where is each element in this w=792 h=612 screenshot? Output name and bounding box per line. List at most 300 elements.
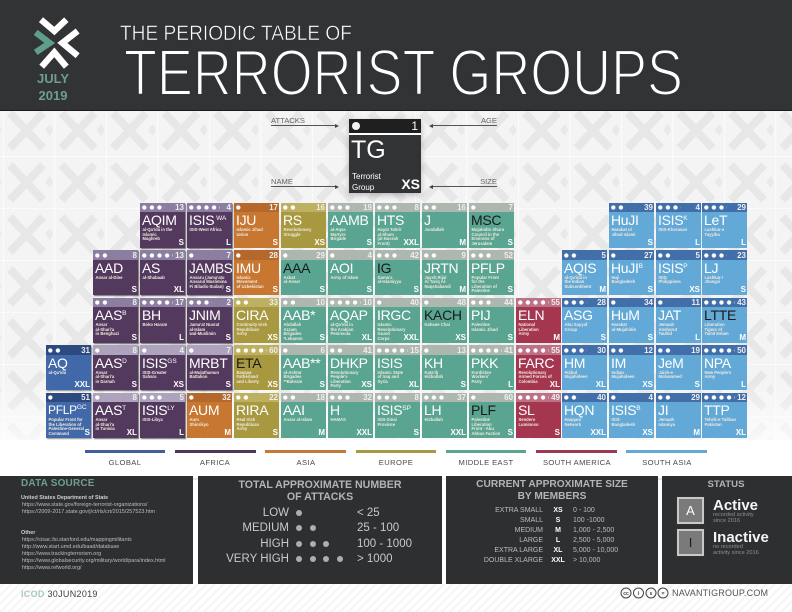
cell: PIJ: 44 [504,298,513,307]
cell: JI: JI [658,402,668,418]
cell: HTS: al-Sham [378,232,394,237]
cell: IMU: 28 [269,250,278,260]
cell: AOI: 4 [368,250,372,260]
cell: DHKP: DHKP [330,354,368,370]
cell: AAI: M [318,428,325,436]
cell: AS: XL [174,285,184,294]
cell: LeT: L [741,238,746,246]
cell: KACH: XS [455,332,466,342]
cell: MSC: MSC [471,212,501,228]
cell: JAT: Anshorut [658,327,677,332]
cell: AAS D: 8 [133,346,137,354]
cell: PFLP: S [508,285,513,294]
cell: HuM: ul-Mujahidin [612,327,636,332]
legend: regions: MIDDLE EAST [458,458,514,467]
cell: IJU: IJU [236,212,256,228]
cell: ISIS SP: ISIS-Sinai [378,417,397,422]
cell: ISIS K: L [695,238,700,246]
heading: attacks: OF ATTACKS [287,491,353,503]
key: name label: NAME [271,177,293,186]
status active: A [686,503,695,518]
cell: SL: 49 [551,393,560,402]
cell: PLF: S [508,428,513,436]
cell: ETA [234,345,279,390]
cell: SL: Luminoso [518,422,539,427]
source links: https://www.trackingterrorism.org [22,551,101,557]
cell: JNIM: al-Islam [190,327,205,332]
cell: PFLP: for the [472,279,485,284]
cell: AAI: Ansar al-Islam [284,417,312,422]
size levels: 2,500 - 5,000 [573,537,614,544]
cell: AQIM: Islamic [142,232,157,237]
key element: TG: TG [351,136,386,164]
cell: MSC: Environs of [472,236,495,241]
legend: regions: AFRICA [200,458,230,467]
status inactive [677,529,769,556]
cell: JRTN [422,250,467,295]
cell: H: XXL [356,428,372,436]
cell: AAA: Asbat [284,274,295,280]
license icons: s [650,591,653,597]
key: name label [271,177,336,187]
cell: AOI: S [367,285,372,294]
cell: AAS B [93,298,138,342]
cell: HM: Mujahideen [564,374,588,379]
cell: AAS D: AASD [95,354,127,370]
cell: HM: HM [564,354,585,370]
cell: HTS: (al-Nusrah [378,236,398,241]
cell: AQIM: al-Qa'ida in the [142,227,172,232]
cell: AQIS: M [599,285,606,294]
cell: RS: Struggle [284,232,300,237]
cell: ASG: Group [564,327,577,332]
cell: JNIM: S [226,332,231,342]
cell: JI: Islamiya [658,422,675,427]
size levels: EXTRA SMALL [495,507,543,514]
cell: JI: Jemaah [658,417,674,422]
cell: HuJI B: HuJIB [611,260,643,276]
cell: HuM: S [648,332,653,342]
date: JULY [37,71,69,86]
cell: HuJI B: 27 [644,250,653,260]
cell: AAS T: XL [127,428,137,436]
cell: IM: Indian [612,370,624,374]
cell: JAT: L [695,332,700,342]
cell: IM: XS [642,380,653,389]
cell: JRTN: 9 [462,250,466,260]
cell: AQAP: Peninsula [330,331,350,336]
cell: JeM: JeM [658,354,684,370]
cell: RIRA: S [273,428,278,436]
cell: JRTN: Naqshabandi [424,284,451,289]
cell: AAB* [281,298,326,342]
cell: AAB**: AAB** [283,354,320,370]
cell: AAA: AAA [283,260,310,276]
cell: ISIS SP: ISISSP [377,402,411,418]
attack levels: HIGH [260,538,289,550]
cell: TTP: Tehrik-e Taliban [704,417,736,422]
cell: ISIS K: ISISK [658,212,688,228]
cell: LH [422,392,467,438]
cell: ISIS GS: ISISGS [142,354,177,370]
cell: LeT: LeT [704,212,727,228]
cell: MRBT: Battalion [190,374,207,379]
heading: size [476,478,628,502]
cell: ELN: 55 [551,298,560,307]
cell: AAS T: in Tunisia [96,426,115,431]
cell: AQ: al-Qa'ida [48,370,66,374]
cell: IG: al-Islamiyya [378,279,401,284]
cell: HQN: HQN [564,402,594,418]
cell: KH [422,345,467,390]
heading: status: STATUS [708,479,744,490]
cell: HQN: XXL [590,428,606,436]
cell: LTTE: Liberation [704,322,725,327]
cell: ASG: ASG [564,307,593,323]
cell: AUM: AUM [189,402,219,418]
cell: NPA [702,345,747,390]
cell: PKK: PKK [471,354,498,370]
attack levels: MEDIUM [242,522,289,534]
cell: IJU: S [273,238,278,246]
cell: CIRA: Army [236,331,247,336]
size levels: 5,000 - 10,000 [573,547,618,554]
cell: AAB**: S [320,380,325,389]
cell: JNIM [187,298,232,342]
cell: BH [140,298,185,342]
cell: ETA: ETA [236,354,261,370]
cell: HuJI B [609,250,654,295]
cell: AAMB: Brigade [330,236,346,241]
cell: JeM [656,345,701,390]
cell: AQAP: AQAP [330,307,368,323]
cell: ISIS: of Iraq and [378,374,399,379]
cell: HuJI: HuJI [611,212,639,228]
cell: AAI [281,392,326,438]
cell: AQIM: S [179,238,184,246]
cell: HuJI B: Huji [612,274,619,280]
status active: Active [713,497,758,514]
size levels: L [556,537,560,544]
cell: HuJI B: Bangladesh [612,279,635,284]
cell: JAT: 11 [692,298,700,307]
cell: ISIS P: ISIS- [658,274,668,280]
cell: HTS: HTS [377,212,404,228]
cell: AQAP: the Arabian [330,327,353,332]
cell: JAT: Jemaah [658,322,674,327]
status active: since 2016 [713,518,740,524]
cell: AAD: Ansar al-Dine [96,274,122,280]
cell: PFLP GC [46,392,91,438]
cell: AUM [187,392,232,438]
cell: ELN [516,298,561,342]
key element: TG: XS [401,176,420,192]
cell: MSC [469,202,514,248]
cell: RIRA: RIRA [236,402,268,418]
attack levels: < 25 [357,507,380,519]
legend: regions: SOUTH AMERICA [543,458,611,467]
cell: AQAP: XL [362,332,372,342]
cell: JNIM: 2 [227,298,231,307]
cell: ISIS B: ISISB [611,402,641,418]
cell: RS: 16 [316,203,325,212]
cell: AAB*: Brigades [284,331,301,336]
cell: HuM [609,298,654,342]
cell: AAS T: al-Shari'a [96,422,114,427]
cell: PFLP GC: Command [48,431,69,436]
cell: AQIS: Subcontinent [564,284,591,289]
cell: RIRA: Real Irish [236,417,255,422]
cell: BH: Boko Haram [142,322,167,327]
cell: AAB**: Brigades [284,374,301,379]
cell: KH: Kata'ib [424,370,438,374]
cell: KH: Hizbollah [424,374,443,379]
cell: PFLP GC: S [85,428,90,436]
cell: AAB**: **Bahrain [284,379,302,384]
size levels: > 10,000 [573,557,600,564]
source links: http://www.start.umd.edu/baad/database [22,544,119,550]
panel: size key [446,476,658,584]
heading: attacks [238,478,402,503]
cell: AAB*: S [320,332,325,342]
key element: TG: Terrorist [352,172,381,181]
cell: ISIS GS: Sahara [142,374,156,379]
cell: PFLP: Popular Front [472,274,499,280]
cell: PFLP: PFLP [471,260,505,276]
cell: ISIS: ISIS [377,354,402,370]
cell: PKK: 41 [504,346,513,354]
cell: SL: S [555,428,560,436]
footer url: NAVANTIGROUP.COM [672,588,768,598]
cell: KH: KH [424,354,443,370]
cell: LTTE [702,298,747,342]
source links: https://www.refworld.org/ [22,565,82,571]
size levels: 1,000 - 2,500 [573,527,614,534]
cell: JAMBS [187,250,232,295]
cell: PIJ: S [508,332,513,342]
cell: IMU [234,250,279,295]
panel: data source [0,476,193,584]
cell: NPA: New People's [704,370,731,374]
cell: ETA: and Liberty [236,379,259,384]
cell: RIRA: 22 [269,393,278,402]
cell: CIRA: CIRA [236,307,268,323]
cell: ISIS P: XS [689,285,700,294]
cell: IRGC: Corps [378,336,390,341]
cell: HM: Hizbul [564,370,577,374]
cell: AAMB: S [367,238,372,246]
key: age label: AGE [481,116,497,125]
cell: DHKP: People's [330,374,348,379]
cell: MSC: Mujahidin Shura [472,227,504,232]
cell: HuJI [609,202,654,248]
cell: ISIS B: XS [642,428,653,436]
size levels: XS [553,507,563,514]
source links: https://cisac.fsi.stanford.edu/mappingmilitants [22,537,132,543]
source links [21,495,166,571]
cell: ETA: Basque [236,370,252,374]
cell: HQN: Network [564,422,581,427]
cell: JeM: Jaish-e [658,370,673,374]
cell: HTS: Hayat Tahrir [378,227,402,232]
cell: HuJI: Harakat ul [612,227,632,232]
cell: PKK: Workers' [472,374,489,379]
footer date: ICOD 30JUN2019 [21,589,98,599]
cell: MSC: Jerusalem [472,241,492,246]
cell: HTS: XXL [403,238,419,246]
legend: regions: SOUTH ASIA [642,458,692,467]
cell: LeT: 29 [737,203,746,212]
cell: ASG [562,298,607,342]
cell: JAMBS: JAMBS [189,260,233,276]
cell: CIRA [234,298,279,342]
cell: HuJI B: S [648,285,653,294]
cell: MSC: 7 [509,203,513,212]
cell: LTTE: LTTE [704,307,736,323]
cell: ISIS LY: ISIS-Libya [142,417,163,422]
cell: AS [140,250,185,295]
cell: JI: 29 [691,393,700,402]
cell: ISIS K [656,202,701,248]
cell: LJ: LJ [704,260,718,276]
cell: PFLP: Palestine [472,288,490,293]
cell: ISIS [375,345,420,390]
cell: AAI: 18 [316,393,325,402]
cell: DHKP [328,345,373,390]
cell: FARC: FARC [518,354,554,370]
cell: JI [656,392,701,438]
key: size label: SIZE [480,177,497,186]
license icons [620,588,668,598]
cell: IJU [234,202,279,248]
cell: IMU: Islamic [236,274,251,280]
cell: LTTE: 43 [737,298,746,307]
cell: FARC: XL [550,380,560,389]
cell: PIJ: Palestine [472,322,490,327]
cell: AAB** [281,345,326,390]
cell: LH: LH [424,402,441,418]
cell: MRBT [187,345,232,390]
table cells [46,203,747,440]
cell: AAB*: AAB* [283,307,315,323]
cell: RS: XS [314,238,325,246]
cell: ISIS P: Philippines [658,279,681,284]
cell: ETA: 60 [269,346,278,354]
cell: ISIS B [609,392,654,438]
cell: AAB**: al-Ashtar [284,370,302,374]
cell: ISIS SP [375,392,420,438]
cell: FARC: Revolutionary [518,370,546,374]
cell: AAS B: al-Shari'a [96,327,114,332]
cell: PLF: Front - Abu [472,426,494,431]
cell: JeM: S [695,380,700,389]
cell: LH: XXL [450,428,466,436]
cell: PKK: L [508,380,513,389]
cell: IMU: IMU [236,260,261,276]
cell: SL: SL [518,402,535,418]
cell: AAMB: 19 [363,203,372,212]
heading: size: BY MEMBERS [518,491,586,502]
cell: ASG: 28 [597,298,606,307]
cell: PKK: Kurdistan [472,370,491,374]
cell: AQ: XXL [74,380,90,389]
cell: AAB*: Abdallah [284,322,301,327]
cell: JI: M [693,428,700,436]
cell: JAMBS: 7 [227,250,231,260]
cell: AQIM: 13 [175,203,184,212]
cell: AAS D: in Darnah [96,379,115,384]
cell: ISIS B: Bangladesh [612,422,635,427]
cell: TTP: Pakistan [704,422,722,427]
cell: HuM: Harakat [612,322,627,327]
cell: PKK: Party [472,379,482,384]
cell: ISIS GS [140,345,185,390]
legend: regions [85,450,707,467]
cell: AQ [46,345,91,390]
size levels: 0 - 100 [573,507,595,514]
cell: SL: Sendero [518,417,535,422]
cell: AAMB: Martyrs [330,232,346,237]
cell: IM [609,345,654,390]
status active: recorded activity [713,512,754,518]
cell: FARC: Armed Forces of [518,374,552,379]
cell: ELN: National [518,322,535,327]
size levels: EXTRA LARGE [494,547,543,554]
cell: ELN: Army [518,331,529,336]
cell: LJ: 23 [737,250,746,260]
attack levels: 25 - 100 [357,522,399,534]
cell: H: 32 [363,393,372,402]
cell: AQIS: al-Qa'ida in [564,274,587,280]
cell: AAS D: Ansar [96,370,107,374]
cell: AQIS [562,250,607,295]
cell: AQ: 31 [81,346,90,354]
cell: HM: 30 [597,346,606,354]
cell: IRGC [375,298,420,342]
cell: CIRA: Continuity Irish [236,322,267,327]
source links: Other [21,530,35,536]
cell: J: J [424,212,431,228]
cell: IJU: Islamic Jihad [236,227,263,232]
cell: ISIS GS: 4 [180,346,184,354]
cell: AAA: S [320,285,325,294]
cell: AAS D: al-Shari'a [96,374,114,379]
legend: regions: GLOBAL [109,458,141,467]
cell: TTP: XL [736,428,746,436]
source links: https://www.state.gov/foreign-terrorist-organizations/ [22,502,147,508]
cell: IG: IG [377,260,391,276]
cell: LeT: Lashkar-e [704,227,724,232]
cell: DHKP: Liberation [330,379,351,384]
status active [677,497,758,524]
cell: ISIS: XL [409,380,419,389]
cell: BH: BH [142,307,161,323]
attack levels: LOW [263,507,289,519]
heading: data source: DATA SOURCE [21,478,95,489]
cell: ISIS WA: L [226,238,231,246]
cell: AAS B: S [132,332,137,342]
cell: LJ: Lashkar-i [704,274,723,280]
cell: AQIS: the Indian [564,279,584,284]
cell: AAS B: in Benghazi [96,331,119,336]
cell: AAS T: Ansar [96,417,107,422]
cell: MSC: Council in the [472,232,499,237]
cell: HTS: Front) [378,241,390,246]
cell: AAA: 29 [316,250,325,260]
size levels: SMALL [520,517,543,524]
cell: AAB**: 6 [321,346,325,354]
cell: ETA: Fatherland [236,374,258,379]
